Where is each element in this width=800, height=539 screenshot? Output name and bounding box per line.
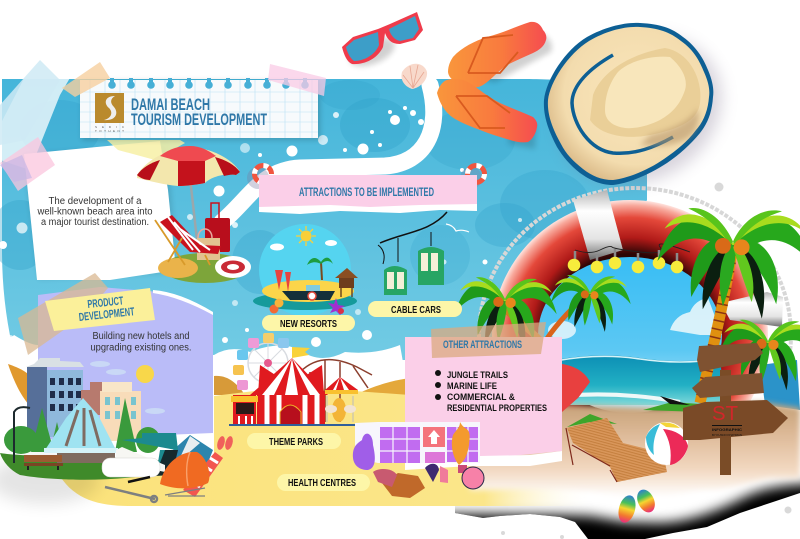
- bench: [24, 455, 63, 470]
- windows: [380, 427, 478, 463]
- suitcase: [205, 218, 230, 252]
- text: description: a major tourist destination.: [41, 217, 149, 228]
- string lights: [568, 244, 690, 273]
- heading: product development: [45, 288, 155, 331]
- seashell: [401, 64, 427, 89]
- tape: other attractions heading: [431, 322, 546, 358]
- panel: product development: [38, 287, 213, 440]
- logo: [95, 93, 125, 133]
- towel: [215, 256, 251, 278]
- title: DAMAI BEACH: [131, 96, 210, 114]
- crown side shadow: [640, 108, 699, 146]
- logo: SEDIC: [95, 125, 125, 129]
- rope: [479, 188, 791, 482]
- ST logo: BY KUSNO KHATIMAN: [712, 434, 742, 437]
- starfish and fish: [328, 298, 345, 316]
- ring white bands: [573, 190, 623, 260]
- lamp post: [14, 407, 30, 463]
- beige hotel: [81, 382, 141, 441]
- umbrella, deck chair and suitcase: [137, 146, 251, 283]
- blue water background: [0, 79, 647, 360]
- list: RESIDENTIAL PROPERTIES: [447, 403, 547, 413]
- illustration: construction tools: [102, 433, 223, 502]
- hotel tower: [26, 358, 84, 437]
- flip flops: [437, 22, 552, 149]
- illustration: palm trees: [456, 208, 800, 403]
- ST logo: ST: [712, 403, 738, 425]
- list: COMMERCIAL &: [447, 392, 515, 402]
- lower right ring patch: [760, 360, 800, 410]
- carousel: [325, 377, 358, 422]
- label: new resorts: [262, 315, 355, 331]
- spiral binding: [108, 78, 309, 89]
- straw hat: [531, 7, 749, 213]
- illustration: new resorts island: [253, 224, 358, 316]
- beach grass: [567, 396, 700, 427]
- lower sandal: [437, 79, 537, 142]
- beach ball: [645, 422, 688, 465]
- scene: sea, sky and life ring: [479, 188, 800, 482]
- list: [435, 370, 547, 413]
- panel: description paper: [24, 141, 177, 280]
- cable car left: [384, 266, 407, 295]
- hat band: [572, 55, 673, 153]
- bubbles: [0, 106, 522, 347]
- cable car right: [418, 247, 444, 285]
- label: health centres: [277, 474, 370, 491]
- list: MARINE LIFE: [447, 381, 497, 391]
- desk and people: [382, 473, 425, 498]
- pink ball: [462, 467, 484, 489]
- icon: striped flip flops: [616, 487, 658, 525]
- ST logo: [712, 403, 743, 437]
- logo: TOTHENT: [95, 129, 124, 133]
- wrench and spanners: [105, 477, 205, 502]
- sun: [296, 226, 316, 246]
- ticket booth: [231, 395, 258, 425]
- boat: [282, 291, 335, 300]
- blueprints: [102, 447, 165, 477]
- sunglasses: [342, 12, 423, 72]
- clouds: [90, 361, 165, 414]
- sand beach: [470, 402, 800, 500]
- signpost: [683, 343, 788, 475]
- illustration: theme park: [229, 333, 372, 426]
- sky: [538, 257, 722, 413]
- tape: top-left large translucent paper: [0, 28, 85, 170]
- icon: small flip flops: [216, 435, 234, 451]
- label: cable cars: [368, 301, 462, 317]
- text: product development body: upgrading existing ones.: [90, 342, 192, 354]
- panel: title note paper: [80, 78, 320, 140]
- illustration: city with hotel and fountain: [0, 358, 175, 480]
- heading: product development: DEVELOPMENT: [78, 306, 135, 324]
- illustration: health centre: [353, 422, 484, 498]
- label: theme parks: [247, 433, 341, 449]
- canopy: [137, 146, 240, 186]
- roller coaster: [300, 360, 372, 422]
- crown top: [605, 57, 686, 128]
- sun: [136, 365, 154, 383]
- list: JUNGLE TRAILS: [447, 370, 508, 380]
- flame plant: [452, 422, 470, 465]
- big top tent: [250, 347, 328, 425]
- hut: [335, 268, 358, 297]
- clouds: [670, 298, 722, 335]
- trees: [4, 398, 160, 454]
- label: health centres: HEALTH CENTRES: [288, 478, 356, 489]
- upper sandal: [448, 22, 546, 87]
- label: theme parks: THEME PARKS: [269, 437, 323, 448]
- tape: tan and pink on title note: [62, 62, 326, 97]
- banner: attractions to be implemented: [259, 175, 477, 214]
- label: new resorts: NEW RESORTS: [280, 319, 337, 330]
- drill: [122, 433, 178, 476]
- lifebuoy right: [460, 166, 484, 189]
- bird: [446, 224, 469, 232]
- tape: other attractions heading: OTHER ATTRACTIONS: [443, 339, 522, 351]
- panel: other attractions: [405, 337, 562, 470]
- tape: pink on description paper: [0, 137, 55, 191]
- label: cable cars: CABLE CARS: [391, 305, 441, 316]
- tape: yellow behind umbrella: [107, 140, 185, 160]
- sea: [555, 355, 725, 405]
- brim: [544, 23, 713, 185]
- black wavy shadow: [455, 475, 800, 539]
- beach umbrella: [562, 364, 590, 412]
- lifebuoy left: [247, 166, 272, 189]
- circle decorations: [501, 182, 792, 539]
- title: TOURISM DEVELOPMENT: [131, 111, 267, 129]
- heading: product development: PRODUCT: [87, 295, 124, 311]
- banner: attractions to be implemented: ATTRACTIONS TO BE IMPLEMENTED: [299, 187, 434, 199]
- helmet: [160, 452, 209, 488]
- sand hills and white clouds: [0, 332, 590, 506]
- illustration: cable cars: [378, 212, 469, 295]
- ST logo: INFOGRAPHIC: [712, 428, 743, 432]
- deck chair: [160, 215, 221, 254]
- tape: tan on product development: [18, 273, 108, 355]
- beach lounger: [566, 418, 667, 482]
- ferris wheel: [233, 333, 289, 390]
- text: product development body: Building new hotels and: [92, 331, 190, 342]
- text: description: The development of a: [48, 196, 142, 207]
- purple blob plant: [353, 434, 375, 470]
- white swoosh path: [222, 85, 434, 222]
- text: description: well-known beach area into: [37, 206, 153, 218]
- crown shadow: [590, 48, 700, 137]
- fountain: [44, 398, 118, 463]
